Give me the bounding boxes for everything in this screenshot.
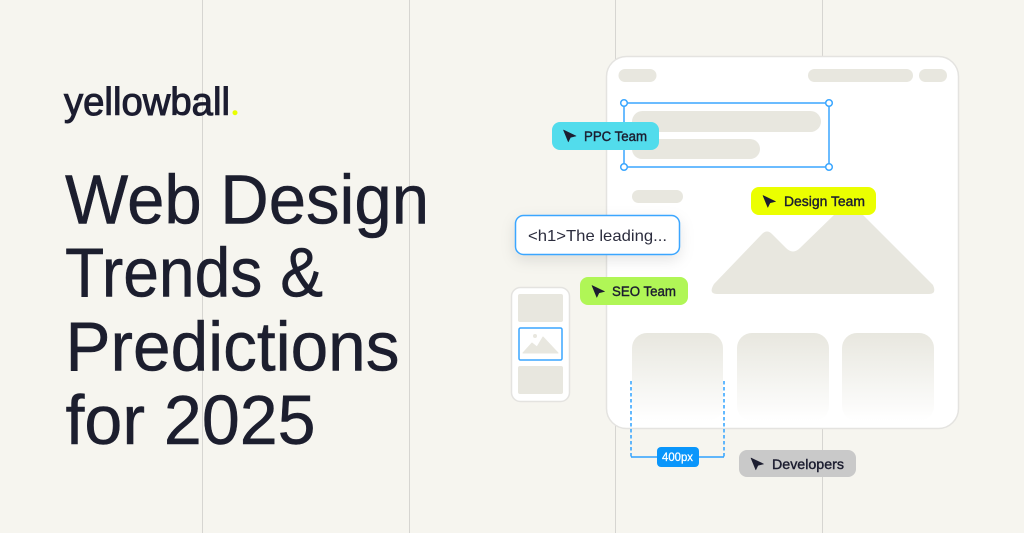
logo: yellowball: yellowball (64, 81, 230, 124)
tag: PPC Team: PPC Team (584, 129, 647, 144)
dimension marker: 400px (631, 381, 724, 467)
title: Predictions (66, 308, 400, 386)
code field: h1: <h1>The leading... (528, 228, 667, 245)
tag: Design Team: Design Team (784, 194, 865, 209)
tag: Developers (739, 450, 856, 477)
selection box (621, 100, 832, 170)
cards (632, 333, 934, 421)
code field: h1 (516, 216, 680, 254)
tag: SEO Team (580, 277, 688, 305)
panel: mobile wireframe (512, 288, 570, 402)
hero image mountains (712, 202, 934, 294)
dimension marker: 400px: 400px (662, 452, 693, 464)
title: for 2025 (66, 381, 316, 459)
tag: PPC Team (552, 122, 659, 150)
panel: browser wireframe (606, 56, 958, 428)
title: Trends & (65, 234, 323, 312)
tag: SEO Team: SEO Team (612, 284, 676, 299)
selected image thumbnail (519, 328, 562, 360)
title (65, 160, 429, 459)
nav placeholders (618, 69, 947, 82)
headline placeholders (632, 111, 821, 159)
small label placeholder (632, 190, 683, 203)
tag: Developers: Developers (772, 457, 844, 472)
tag: Design Team (751, 187, 876, 215)
title: Web Design (65, 160, 429, 238)
